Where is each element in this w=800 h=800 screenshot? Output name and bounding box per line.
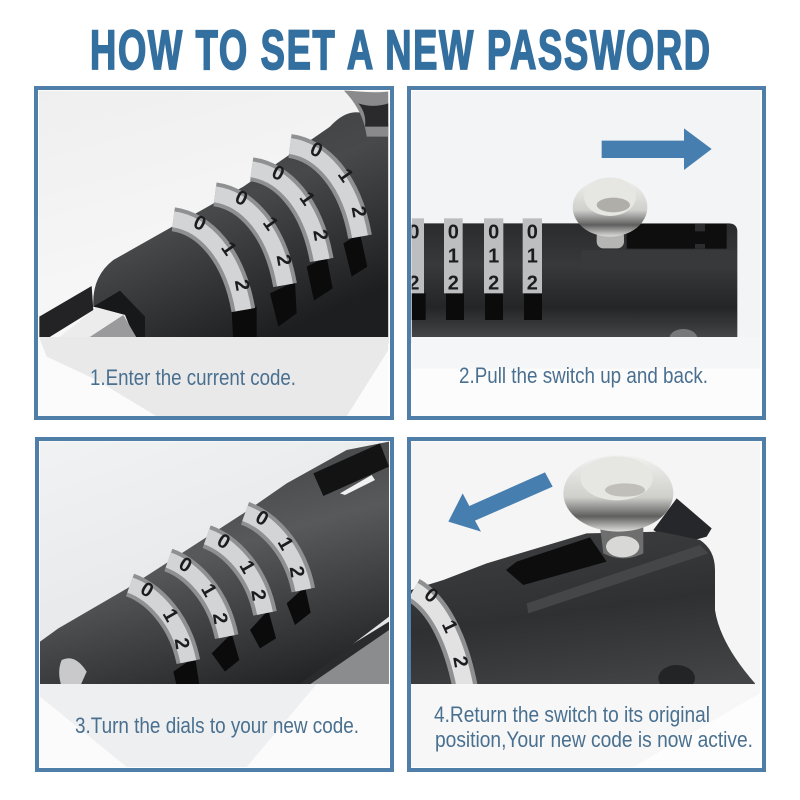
step 1 caption band [39, 337, 388, 416]
step 4 caption band [411, 684, 755, 694]
dial 4: 0 [252, 506, 272, 531]
dial 3 [484, 218, 503, 294]
dial: 1 [437, 617, 462, 636]
dial 1: 2 [230, 278, 253, 293]
dial 2: 2 [448, 272, 459, 294]
dial 1: 0 [190, 211, 209, 236]
step 4 lock photo [411, 442, 760, 684]
dial 2: 2 [208, 611, 231, 626]
dial 1: 0 [137, 578, 157, 603]
dial 2: 2 [272, 253, 295, 268]
dial 2: 0 [448, 221, 459, 243]
dial 4: 1 [273, 534, 297, 554]
dial 4 [523, 218, 542, 294]
dial 3: 1 [488, 246, 499, 268]
panel: step 4 return the switch [409, 439, 764, 770]
dial 1 [173, 211, 253, 310]
step 3 caption band [40, 684, 389, 767]
step 4 frame [409, 439, 764, 770]
step 2 caption: 2.Pull the switch up and back. [459, 363, 708, 388]
dial 2: 0 [232, 186, 251, 211]
dial 3: 2 [246, 588, 270, 603]
panel: step 2 pull the switch [408, 88, 764, 418]
dial 2: 1 [258, 213, 282, 235]
dial 3: 2 [488, 272, 499, 294]
step 3 caption: 3.Turn the dials to your new code. [75, 713, 359, 738]
step 1 caption: 1.Enter the current code. [90, 365, 296, 390]
dial 3 [252, 161, 332, 260]
dial 4: 0 [527, 221, 538, 243]
switch knob [573, 177, 647, 248]
dial 1: 1 [216, 238, 241, 260]
step 4 caption: position,Your new code is now active. [435, 727, 753, 752]
dial 3: 1 [295, 188, 319, 210]
dial 2: 1 [448, 246, 459, 268]
step 3 lock photo [40, 441, 389, 767]
dial 4: 1 [333, 165, 357, 186]
dial 4 [245, 506, 308, 590]
dial: 2 [448, 654, 472, 669]
dial 4: 2 [285, 564, 308, 579]
arrow: right [602, 128, 712, 170]
step 4 caption: 4.Return the switch to its original [434, 702, 710, 727]
dial 2: 0 [175, 553, 195, 578]
dial 4: 2 [347, 204, 370, 219]
title: HOW TO SET A NEW PASSWORD [90, 19, 710, 82]
dial 3: 2 [308, 228, 332, 243]
dial: 0 [420, 584, 442, 608]
dial 1 [130, 578, 193, 662]
dial 3: 1 [234, 557, 259, 577]
dial 1: 1 [158, 605, 182, 626]
dial 4: 1 [527, 246, 538, 268]
step 2 caption band [412, 337, 761, 416]
dial 1 partial [412, 218, 424, 294]
dial 2 [444, 218, 463, 294]
dial 4: 0 [307, 138, 326, 163]
dial 3: 0 [488, 221, 499, 243]
dial 2 [168, 553, 231, 637]
dial 1 partial: 0 [408, 221, 420, 243]
step 2 frame [409, 88, 764, 418]
panel: step 3 turn the dials [37, 439, 392, 770]
dial 4: 2 [527, 272, 538, 294]
step 3 frame [37, 439, 392, 770]
step 2 lock photo [412, 91, 760, 368]
dial [413, 584, 472, 687]
switch knob [563, 455, 673, 558]
dial 3 [207, 530, 270, 613]
panel: step 1 enter current code [36, 88, 392, 418]
step 1 frame [36, 88, 392, 418]
step 1 lock photo [39, 90, 388, 416]
dial 3: 0 [213, 530, 234, 554]
dial 3: 0 [268, 161, 288, 186]
dial 2 [215, 186, 295, 285]
dial 1 partial: 2 [408, 272, 420, 294]
arrow: left [448, 472, 553, 532]
dial 2: 1 [196, 580, 221, 601]
dial 1: 2 [170, 636, 193, 651]
dial 4 [290, 138, 370, 237]
